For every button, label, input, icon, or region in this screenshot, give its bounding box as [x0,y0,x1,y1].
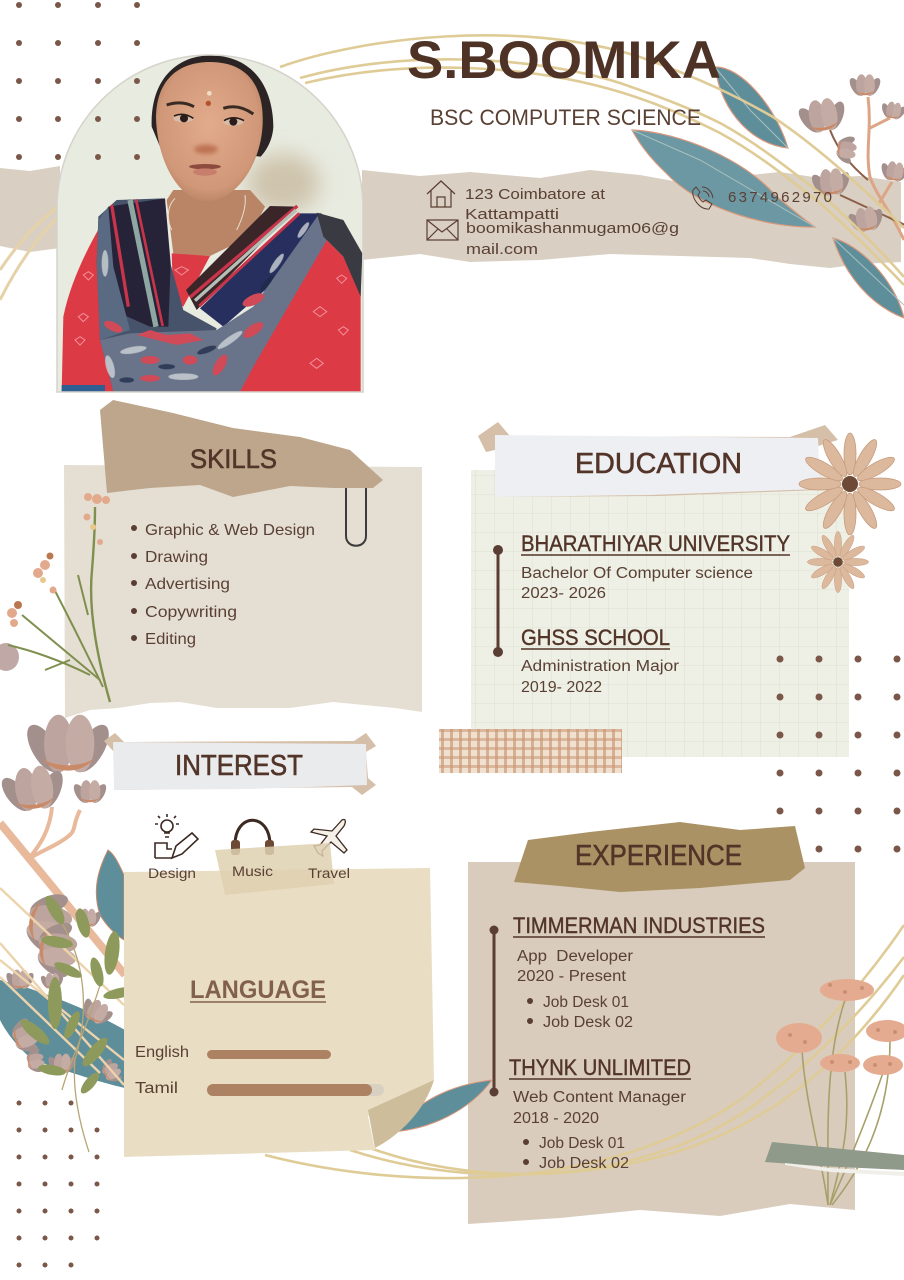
right drape navy [200,213,320,327]
language: English: English [135,1044,189,1061]
torn contact band [0,166,901,268]
scarf base [97,198,217,392]
entry: school: Administration Major [521,658,679,675]
scarf motifs [102,291,266,382]
neck [167,190,265,256]
left pattern strip [97,207,130,340]
phone number: 6374962970 [728,189,832,206]
entry: Thynk [509,1055,691,1172]
right dark scarf [317,213,362,297]
panel: skills [0,400,422,718]
lips [189,164,221,169]
profile photo [57,55,363,392]
language: Tamil [135,1080,384,1097]
interest heading: INTEREST [175,750,303,782]
background gold arcs: top [280,35,904,285]
background dot grid: top left [16,2,140,160]
skills list [131,522,315,648]
language heading: LANGUAGE [190,976,326,1004]
translucent tape on note [215,843,334,895]
language: English [135,1044,331,1061]
panel: language [124,843,492,1157]
skills list: Drawing [145,549,208,566]
email text: mail.com [466,241,538,258]
entry: university: Bachelor Of Computer science [521,565,753,582]
left gold arcs [0,205,60,300]
icon: headphones [231,820,274,855]
experience heading tape [514,822,805,892]
skills list: Editing [145,631,196,648]
wildflowers [776,979,904,1205]
email text [466,220,679,258]
dress motifs [75,267,348,368]
entry: Timmerman: 2020 - Present [517,968,627,985]
name heading: S.BOOMIKA [407,31,721,90]
decorative wildflower sprig [0,493,110,702]
language: Tamil: Tamil [135,1080,178,1097]
entry: university [521,531,790,602]
arrow leaf [390,1080,492,1132]
necklace [168,195,245,230]
flowers [799,433,901,593]
grey tape [765,1142,904,1176]
panel: education [471,422,901,757]
entry: Timmerman: Job Desk 02 [543,1014,633,1031]
entry: Timmerman: App Developer [517,948,633,965]
bindi [207,91,212,96]
face [156,62,263,201]
background dot grid: right [776,656,900,852]
sticky note [124,868,434,1157]
address text: 123 Coimbatore at [465,186,606,203]
panel: experience [265,822,904,1224]
music label: Music [232,863,273,879]
travel label: Travel [308,865,350,881]
wall shadow [247,153,320,213]
entry: Thynk: Job Desk 02 [539,1155,629,1172]
checked washi tape [439,729,622,773]
entry: Timmerman [513,913,765,1031]
patterned band [100,213,337,392]
entry: Timmerman: TIMMERMAN INDUSTRIES [513,913,765,938]
address text [465,186,606,223]
icon: design [155,814,198,858]
education timeline [493,545,503,657]
entry: university: BHARATHIYAR UNIVERSITY [521,531,790,556]
entry: school [521,625,679,696]
left scarf navy fold [108,198,171,327]
experience heading: EXPERIENCE [575,840,742,872]
contact details [427,181,832,258]
gold arcs over paper [265,925,904,1178]
nose [194,145,218,154]
icon: house [427,181,455,207]
grid paper [471,470,849,757]
decorative leaves and flowers: top right [632,67,904,318]
entry: school: 2019- 2022 [521,679,602,696]
entry: Thynk: 2018 - 2020 [513,1110,599,1127]
panel: interest [104,733,376,858]
education heading: EDUCATION [575,448,742,480]
address text: Kattampatti [465,206,559,223]
skills paper [64,465,422,718]
skills list: Copywriting [145,604,237,621]
icon: envelope [427,220,458,240]
entry: school: GHSS SCHOOL [521,625,670,650]
entry: Thynk: Job Desk 01 [539,1135,625,1152]
decorative floral cluster: left [0,715,138,1152]
right drape dark shadow [186,206,297,310]
heading tape [478,422,838,497]
hair [152,55,273,157]
email text: boomikashanmugam06@g [466,220,679,237]
skills list: Graphic & Web Design [145,522,315,539]
experience paper [468,862,855,1224]
icon: phone [693,187,713,209]
design label: Design [148,865,196,881]
icon: airplane [311,819,347,856]
skills heading tape [100,400,383,497]
interest tape [104,733,376,795]
right stripes [190,206,297,297]
skills heading: SKILLS [190,444,277,474]
entry: Thynk: THYNK UNLIMITED [509,1055,691,1080]
icon: paper clip [346,488,366,546]
red dress [62,227,117,392]
timeline [490,926,498,1096]
background dot grid: bottom left [16,1100,100,1268]
eyes and brows [167,103,253,114]
skills list: Advertising [145,576,230,593]
entry: university: 2023- 2026 [521,585,606,602]
entry: Thynk: Web Content Manager [513,1089,686,1106]
entry: Timmerman: Job Desk 01 [543,994,629,1011]
subtitle: BSC COMPUTER SCIENCE [430,105,701,130]
